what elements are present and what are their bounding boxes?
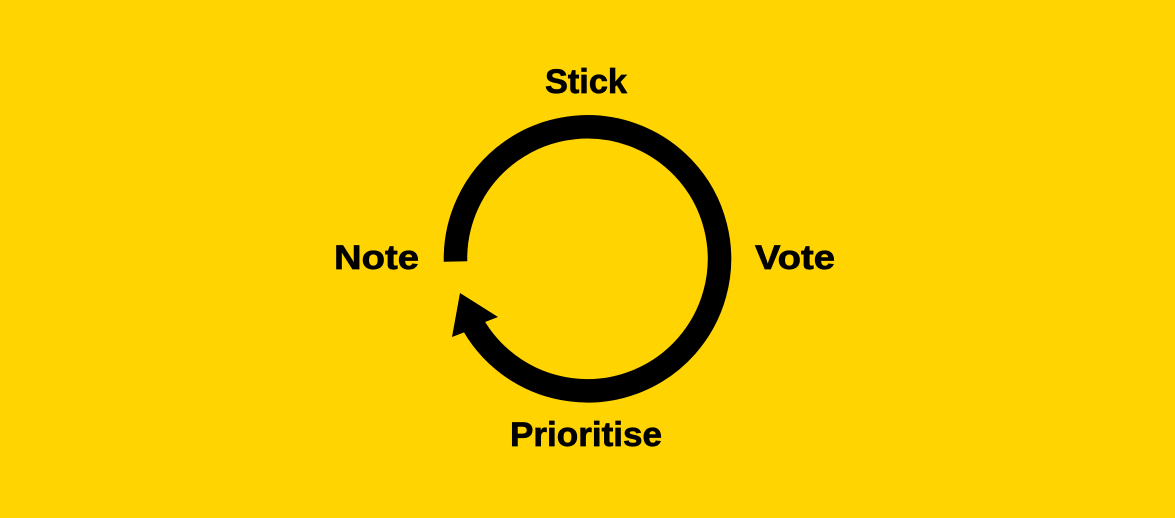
label: Stick: Stick	[545, 63, 627, 101]
label: Note: Note	[334, 239, 419, 277]
label: Vote: Vote	[755, 239, 835, 277]
circular arrow	[452, 127, 719, 391]
label: Prioritise: Prioritise	[510, 416, 662, 454]
